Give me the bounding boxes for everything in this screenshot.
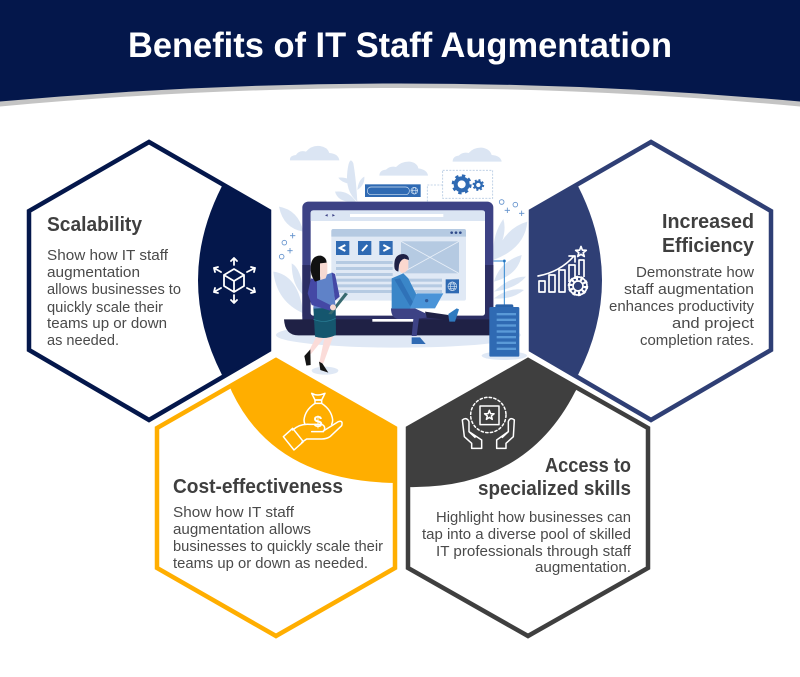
text: efficiency description (609, 265, 755, 349)
panel: cost-effectiveness (157, 358, 397, 636)
text: cost description: businesses to quickly scale their (173, 539, 383, 555)
icon: money bag in hand (283, 393, 342, 450)
woman with tablet (304, 256, 348, 375)
heading: increased efficiency (662, 211, 755, 257)
text: cost description (173, 505, 383, 572)
background plants (273, 161, 527, 313)
text: scalability description: augmentation (47, 265, 140, 281)
man with laptop (391, 254, 459, 344)
panel: scalability (29, 142, 271, 420)
decorative sparkles (279, 200, 524, 259)
icon: hands holding star (462, 397, 514, 448)
connector wire (493, 260, 505, 306)
text: access description (422, 510, 632, 576)
panel: access to specialized skills (406, 358, 648, 636)
text: efficiency description: completion rates. (640, 333, 754, 349)
text: scalability description (47, 248, 181, 349)
laptop (284, 202, 493, 335)
header banner (0, 0, 800, 106)
icon: cube with arrows (214, 258, 255, 303)
text: access description: Highlight how businesses can (436, 510, 631, 526)
text: efficiency description: and project (672, 316, 754, 332)
heading: scalability: Scalability (47, 214, 143, 236)
heading: cost-effectiveness: Cost-effectiveness (173, 476, 343, 498)
server (482, 304, 527, 360)
code window (331, 229, 466, 301)
text: access description: IT professionals through staff (436, 544, 632, 560)
panel: increased efficiency (529, 142, 771, 420)
heading: increased efficiency: Increased (662, 211, 754, 233)
text: scalability description: quickly scale their (47, 300, 163, 316)
heading: access to specialized skills (478, 455, 631, 500)
heading: access to specialized skills: specialized skills (478, 478, 631, 500)
text: scalability description: Show how IT staff (47, 248, 169, 264)
search bar and gears (365, 170, 493, 202)
text: efficiency description: staff augmentation (624, 282, 754, 298)
title: Benefits of IT Staff Augmentation (128, 26, 672, 65)
text: scalability description: teams up or down (47, 316, 167, 332)
laptop base shadow (276, 322, 521, 348)
text: cost description: augmentation allows (173, 522, 311, 538)
text: scalability description: allows businesses to (47, 282, 181, 298)
text: scalability description: as needed. (47, 333, 119, 349)
icon: dollar sign: $ (314, 414, 323, 431)
heading: increased efficiency: Efficiency (662, 235, 755, 257)
clouds (290, 146, 502, 176)
illustration: team working on laptop (273, 146, 527, 360)
text: cost description: Show how IT staff (173, 505, 295, 521)
text: efficiency description: enhances productivity (609, 299, 755, 315)
text: access description: augmentation. (535, 560, 631, 576)
text: access description: tap into a diverse pool of skilled (422, 527, 631, 543)
heading: access to specialized skills: Access to (545, 455, 631, 477)
icon: chart with gear and star (538, 246, 587, 295)
text: cost description: teams up or down as needed. (173, 556, 368, 572)
text: efficiency description: Demonstrate how (636, 265, 755, 281)
